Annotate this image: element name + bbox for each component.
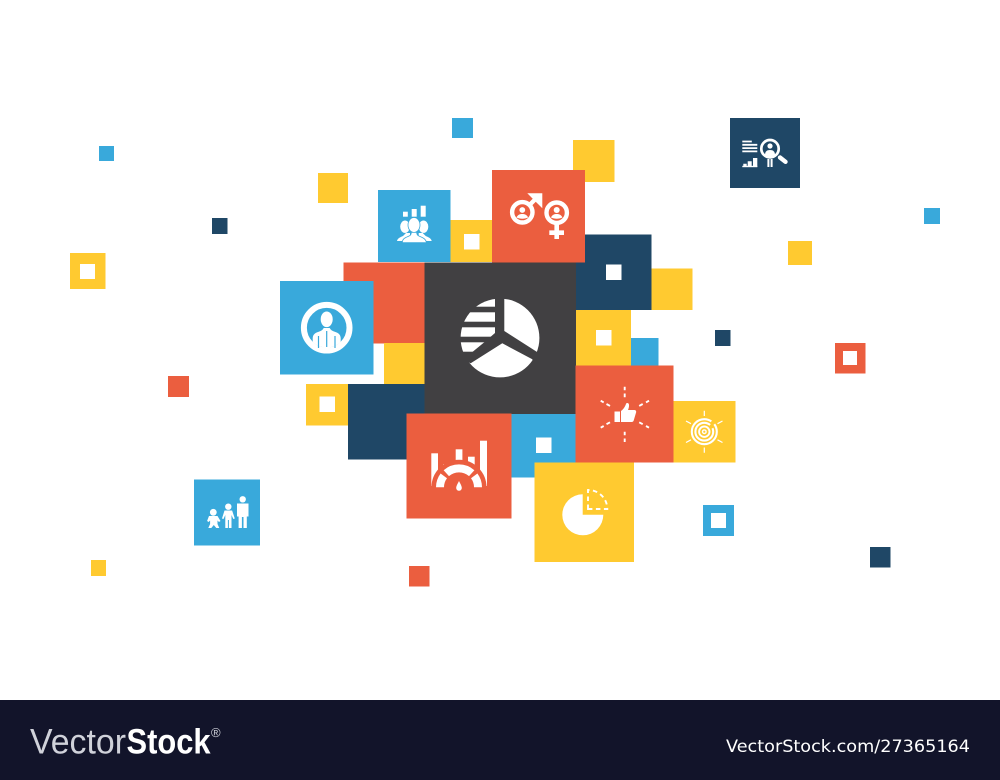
tile: pie fraction	[534, 462, 634, 562]
icon: radar target	[686, 411, 722, 453]
scattered decorative squares	[70, 118, 940, 586]
tile: target	[674, 401, 736, 462]
icon: male and female symbols	[512, 193, 567, 239]
icon: pie with dashed quarter	[562, 490, 607, 535]
cluster backing squares	[306, 140, 692, 478]
tile: gender	[492, 170, 585, 262]
tile: audience analytics	[378, 190, 450, 262]
tile: performance gauge	[406, 414, 512, 518]
image id text: VectorStock.com/27365164	[726, 737, 970, 756]
icon: family by age	[207, 496, 248, 528]
footer bar	[0, 700, 1000, 780]
icon: thumbs up with rays	[601, 387, 649, 442]
tile: employee profile	[280, 281, 374, 374]
logo: VectorStock	[30, 722, 221, 762]
icon: segmented pie chart	[460, 298, 540, 378]
icon: bars with gauge	[431, 441, 487, 491]
tile: central pie chart	[424, 262, 576, 414]
logo: VectorStock: ®	[211, 725, 221, 740]
icon: person in circle	[304, 305, 350, 352]
tile: search demographics	[730, 118, 800, 188]
icon: group with bar chart	[397, 206, 432, 243]
logo: VectorStock: Vector	[30, 722, 126, 762]
tile: age groups	[194, 480, 260, 546]
tile: approval rating	[576, 366, 674, 462]
logo: VectorStock: Stock	[126, 722, 211, 762]
icon: report and magnifier	[742, 140, 786, 167]
